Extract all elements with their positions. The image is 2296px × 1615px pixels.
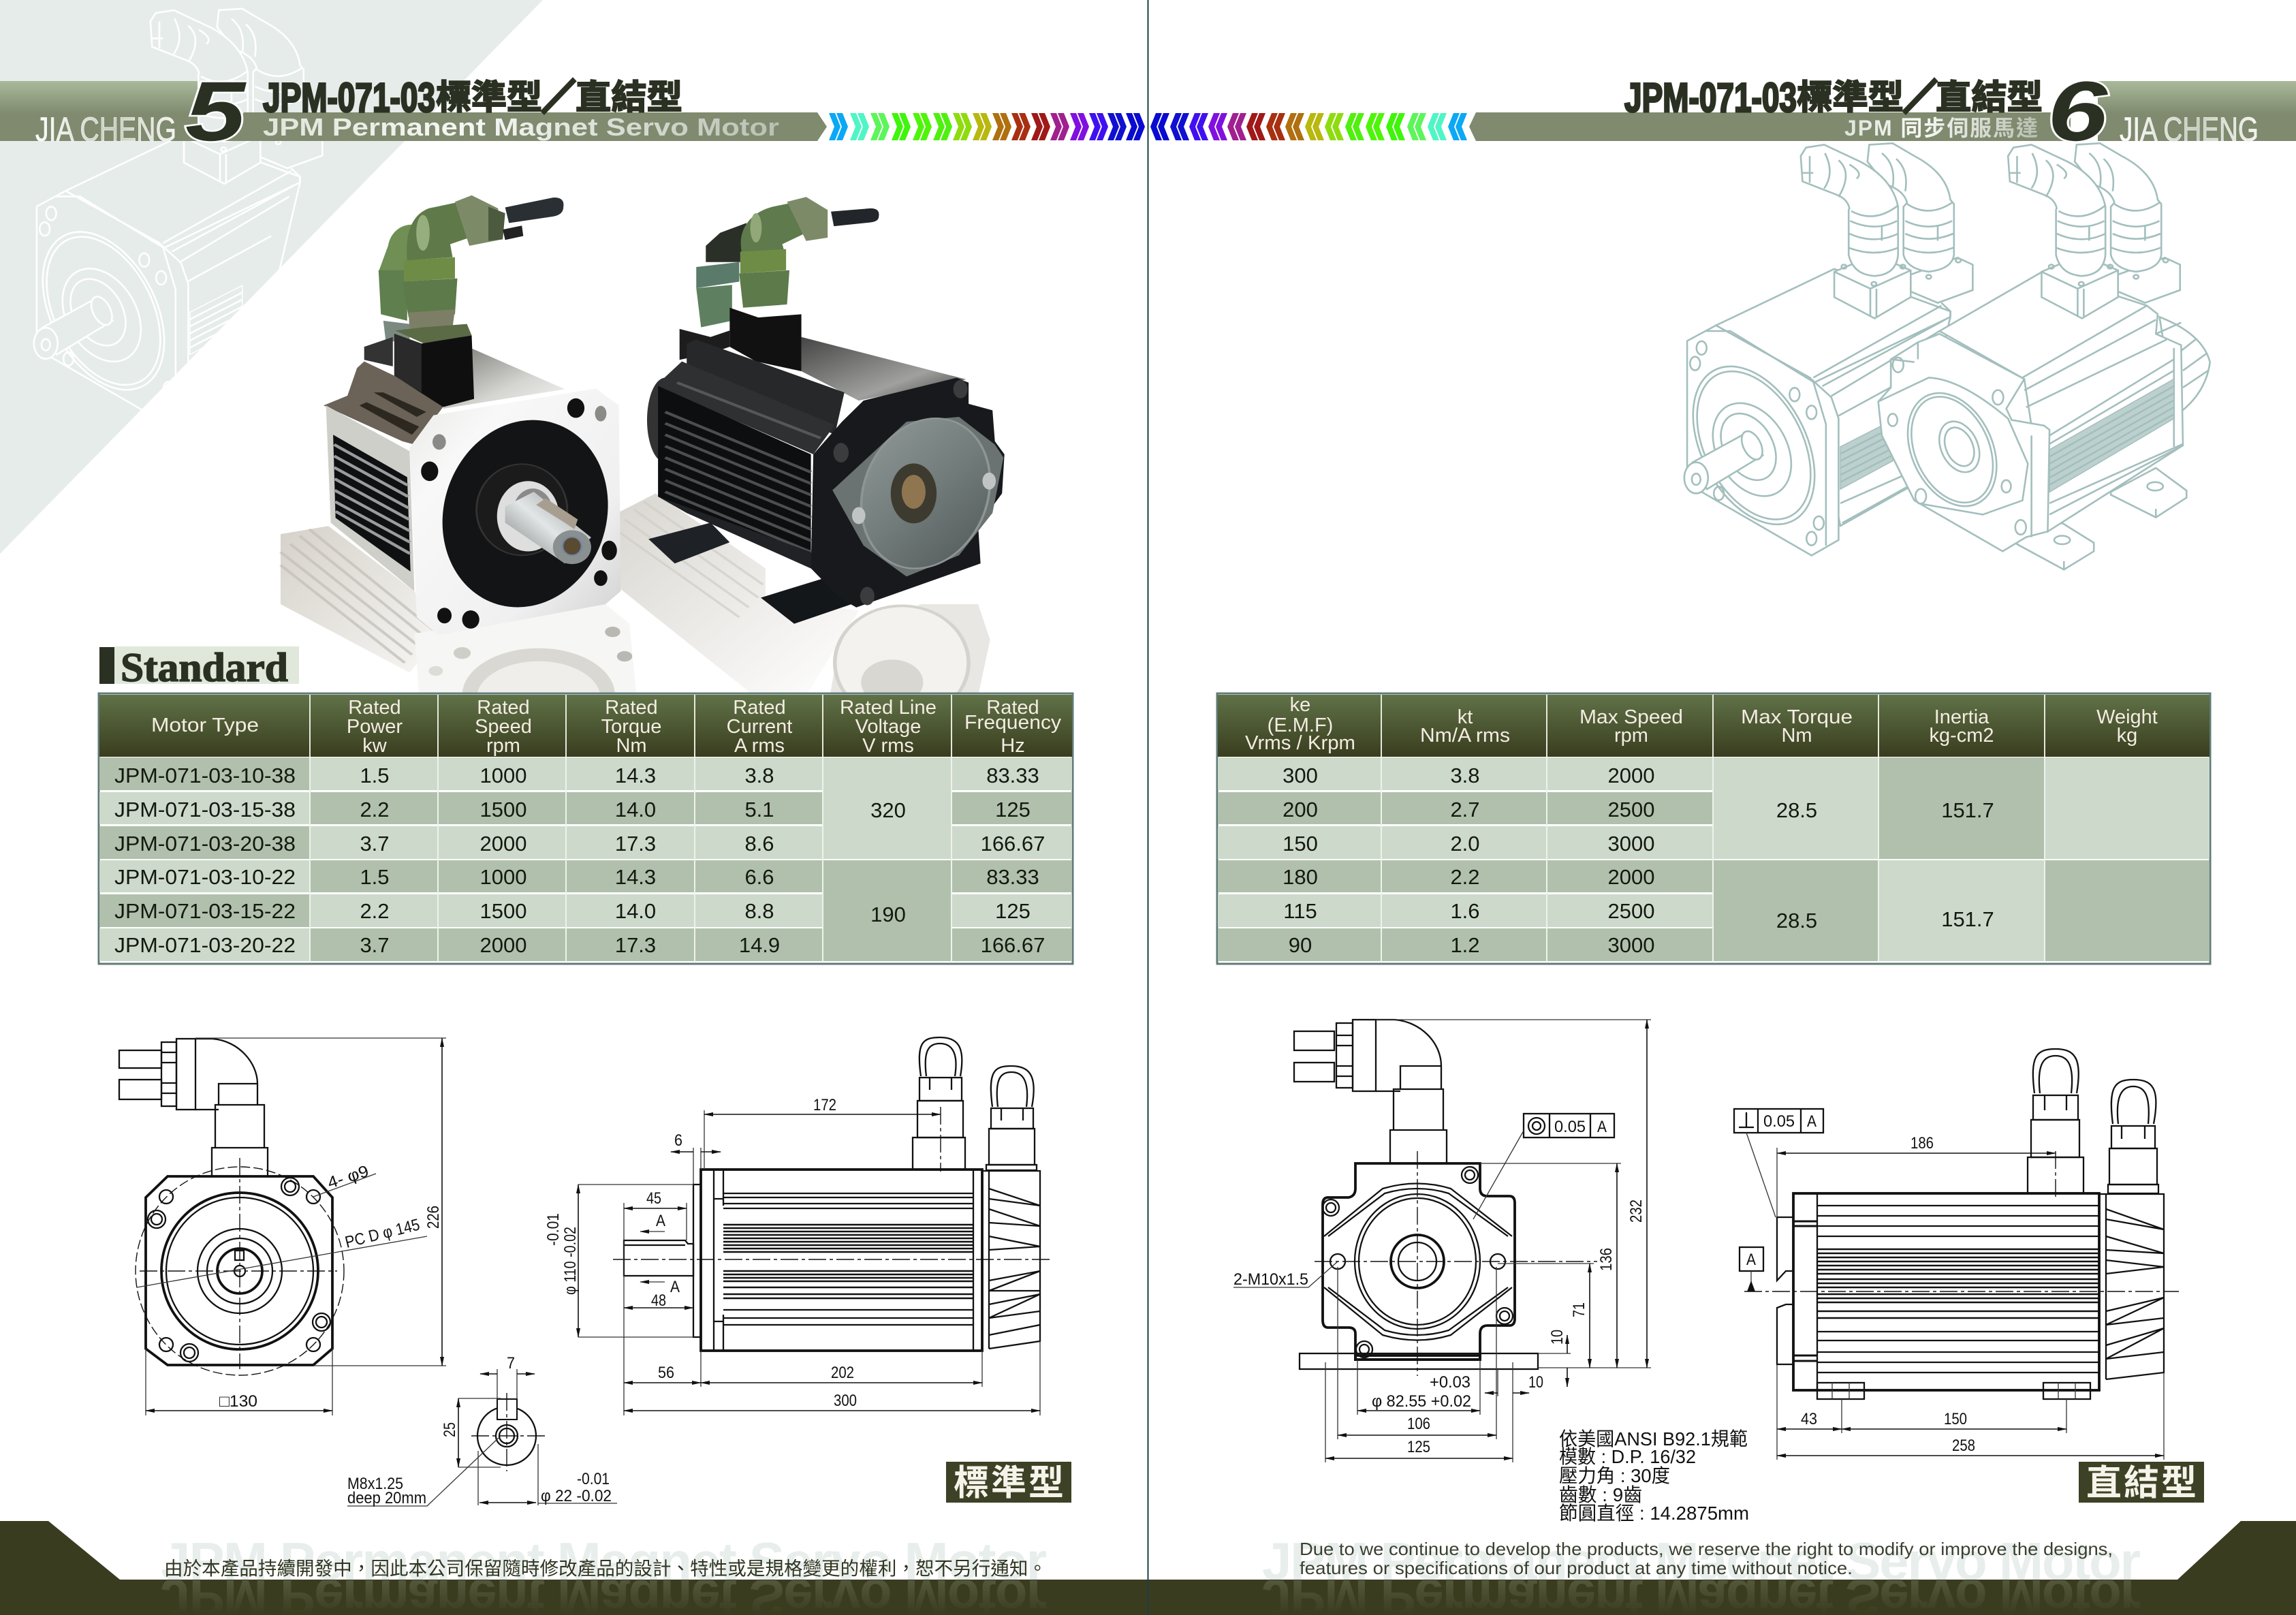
table header row: kg	[2117, 725, 2137, 747]
table values: JPM-071-03-20-38	[114, 832, 296, 856]
table values: JPM-071-03-10-38	[114, 764, 296, 787]
gear specification note: 依美國ANSI B92.1規範	[1559, 1428, 1748, 1449]
shaft key section view: 7	[507, 1354, 515, 1373]
table values: JPM-071-03-20-22	[114, 933, 296, 957]
table values: 2.2	[1450, 865, 1480, 889]
table values: 3.7	[360, 832, 390, 856]
table values: 151.7	[1941, 907, 1994, 931]
table values: JPM-071-03-10-22	[114, 865, 296, 889]
callout: PCD phi145	[137, 1216, 427, 1287]
side view dimensions: -0.01	[544, 1213, 563, 1246]
gear specification note: 壓力角 : 30度	[1559, 1465, 1670, 1486]
table values: 3000	[1608, 933, 1654, 957]
footer watermarks: JPM Permanent Magnet Servo Motor	[161, 1531, 1047, 1591]
front view dimensions: 106	[1407, 1415, 1430, 1433]
shaft key section view: 25	[441, 1422, 459, 1437]
gear specification note: 節圓直徑 : 14.2875mm	[1559, 1503, 1749, 1524]
body ridges	[687, 340, 845, 435]
perpendicularity tolerance box	[1734, 1109, 1823, 1217]
title: JPM-071-03	[1624, 75, 1797, 121]
thread callout 2-M10x1.5	[1233, 1261, 1338, 1289]
table header row: rpm	[486, 735, 520, 757]
side view dimensions: 300	[834, 1392, 857, 1410]
table header row: Nm	[1781, 725, 1812, 747]
line art of two motors on right page	[1670, 143, 2210, 569]
concentricity tolerance box: 0.05	[1554, 1118, 1586, 1136]
dimension: 226: 226	[424, 1206, 443, 1229]
table values: 1500	[480, 899, 526, 923]
band segment behind brand	[2098, 81, 2296, 141]
table values: 1500	[480, 798, 526, 821]
table header row: V rms	[862, 735, 914, 757]
table values: 28.5	[1776, 798, 1817, 822]
table header row: Rated	[605, 697, 658, 719]
title	[1624, 75, 2043, 121]
terminal block	[729, 308, 802, 371]
table values: 1.2	[1450, 933, 1480, 957]
gear specification note: 齒數 : 9齒	[1559, 1484, 1642, 1505]
table body cells	[99, 757, 1072, 961]
face plate holes	[421, 398, 617, 629]
table values: 2000	[480, 933, 526, 957]
reflections on floor	[281, 493, 990, 742]
footer note English: Due to we continue to develop the products, we reserve the right to modify or improve the designs,	[1300, 1539, 2113, 1559]
table values: 14.3	[615, 865, 656, 889]
table values	[114, 764, 1045, 957]
table values: 2.7	[1450, 798, 1480, 821]
perpendicularity tolerance box: 0.05	[1763, 1112, 1795, 1131]
table values: 1.5	[360, 865, 390, 889]
silver face plate	[409, 388, 620, 635]
table values: 151.7	[1941, 798, 1994, 822]
front view dimensions: φ 82.55 +0.02	[1372, 1392, 1471, 1411]
table values: 125	[995, 899, 1031, 923]
black front plate	[811, 378, 1005, 608]
tolerance note phi22	[538, 1470, 617, 1505]
rainbow chevrons left	[829, 113, 1145, 140]
front view dimensions: 71	[1570, 1302, 1588, 1317]
technical drawing: direct coupling type	[1233, 1020, 2204, 1524]
table values: 1000	[480, 764, 526, 787]
table values: 3.8	[1450, 764, 1480, 787]
table header row: Rated	[348, 697, 401, 719]
callout: PCD phi145: PC D φ 145	[343, 1216, 422, 1252]
title: 標準型	[1797, 78, 1904, 116]
table values: 90	[1289, 933, 1312, 957]
table values: 180	[1283, 865, 1318, 889]
cable elbow	[741, 202, 806, 252]
callout: 4-phi9: 4- φ9	[326, 1162, 371, 1193]
side view dimensions: 48	[651, 1291, 666, 1310]
table values: 320	[870, 798, 906, 822]
side view dimensions: 150	[1944, 1410, 1967, 1428]
table header row	[1218, 694, 2209, 757]
black bearing disc	[431, 415, 619, 612]
table values: 300	[1283, 764, 1318, 787]
front view dimensions: 10	[1528, 1373, 1543, 1392]
page number 6: 6	[2047, 65, 2108, 159]
thread note: deep 20mm	[347, 1489, 426, 1507]
body ridge	[324, 362, 443, 445]
table header row: rpm	[1614, 725, 1648, 747]
footer note English	[1300, 1539, 2113, 1578]
table values: 2000	[480, 832, 526, 856]
table header row: Motor Type	[151, 715, 259, 736]
table values: 83.33	[986, 764, 1039, 787]
band segment behind brand	[0, 81, 198, 141]
table values: 8.8	[744, 899, 774, 923]
title: 直結型	[1936, 78, 2043, 116]
rear connector	[706, 223, 746, 262]
table header row: Inertia	[1934, 706, 1990, 728]
shaft key section view	[441, 1354, 545, 1505]
side view dimensions: φ 110 -0.02	[561, 1227, 580, 1295]
table values: 166.67	[981, 832, 1045, 856]
table values: 2.0	[1450, 832, 1480, 856]
side view dimensions: A	[670, 1278, 680, 1296]
front view dimensions: 10	[1548, 1330, 1567, 1345]
footer watermark reflections	[161, 1580, 2140, 1605]
rear connector	[379, 225, 412, 272]
front view	[119, 1039, 344, 1375]
subtitle: JPM 同步伺服馬達	[1844, 116, 2038, 140]
side view dimensions: 45	[646, 1189, 661, 1208]
table values: 190	[870, 903, 906, 926]
table values: 1000	[480, 865, 526, 889]
table values: 115	[1283, 899, 1317, 923]
footer watermarks: JPM Permanent Magnet Servo Motor	[1262, 1531, 2141, 1591]
footer note English: features or specifications of our product at any time without notice.	[1300, 1558, 1853, 1578]
table header row: Max Torque	[1741, 706, 1853, 728]
rainbow chevrons right	[1150, 113, 1467, 140]
front connector	[404, 257, 455, 281]
table values: 14.3	[615, 764, 656, 787]
table values: 2.2	[360, 798, 390, 821]
table header row: kt	[1458, 706, 1473, 728]
table header row: Rated Line	[840, 697, 937, 719]
side view dimensions	[1777, 1134, 2164, 1460]
finned side	[658, 386, 811, 559]
table values: 125	[995, 798, 1031, 821]
concentricity tolerance box: A	[1597, 1118, 1607, 1136]
table values: 2000	[1608, 865, 1654, 889]
table frame	[1217, 693, 2210, 964]
mounting feet	[648, 522, 729, 563]
table values: 1.5	[360, 764, 390, 787]
table values: JPM-071-03-15-38	[114, 798, 296, 821]
table header row: Rated	[986, 697, 1039, 719]
title: 直結型	[576, 78, 682, 116]
table header row: A rms	[734, 735, 785, 757]
title: ／	[1904, 78, 1936, 116]
side view dimensions: A	[656, 1212, 665, 1230]
table values: 2.2	[360, 899, 390, 923]
gear specification note	[1559, 1428, 1749, 1524]
ghost line art motor on left page	[20, 9, 322, 421]
table values: 17.3	[615, 933, 656, 957]
thread callout 2-M10x1.5: 2-M10x1.5	[1233, 1270, 1308, 1289]
table values: 2500	[1608, 798, 1654, 821]
table values: 8.6	[744, 832, 774, 856]
table values: 5.1	[744, 798, 774, 821]
table header row: Torque	[601, 716, 661, 738]
badge: direct coupling type: 直結型	[2086, 1464, 2197, 1503]
table values: 3000	[1608, 832, 1654, 856]
side view	[613, 1037, 1050, 1351]
table header row: Nm	[616, 735, 647, 757]
dimension: square 130	[146, 1349, 332, 1415]
front view dimensions	[1325, 1020, 1651, 1462]
table header row	[99, 695, 1072, 757]
side view dimensions: 56	[658, 1364, 674, 1382]
table header row: Current	[727, 716, 792, 738]
table header row: Speed	[475, 716, 532, 738]
table header row: kg-cm2	[1929, 725, 1994, 747]
table values: 166.67	[981, 933, 1045, 957]
band segment behind subtitle	[1469, 112, 2071, 141]
line art: rear motor	[1670, 143, 1972, 556]
table values: 2000	[1608, 764, 1654, 787]
silver flange	[832, 417, 1003, 576]
brand name: JIA CHENG	[2120, 110, 2259, 148]
thread note	[347, 1438, 499, 1507]
table body cells	[1218, 757, 2209, 961]
datum A marker: A	[1746, 1251, 1756, 1269]
thread note: M8x1.25	[347, 1475, 403, 1493]
table values: 2500	[1608, 899, 1654, 923]
side view	[1744, 1049, 2179, 1399]
tolerance note phi22: -0.01	[577, 1470, 610, 1488]
band segment behind subtitle	[225, 112, 827, 141]
front view dimensions: 232	[1627, 1200, 1646, 1223]
front view	[1294, 1020, 1597, 1376]
front view dimensions: 136	[1597, 1248, 1616, 1271]
table header row: (E.M.F)	[1268, 715, 1333, 736]
right black motor	[647, 197, 1005, 624]
front view dimensions: +0.03	[1430, 1373, 1471, 1392]
side view dimensions: 202	[831, 1364, 854, 1382]
header band: left page	[0, 65, 827, 159]
table header row: kw	[362, 735, 388, 757]
subtitle: JPM Permanent Magnet Servo Motor	[263, 113, 779, 141]
technical drawing: standard type	[119, 1037, 1071, 1507]
table values: 83.33	[986, 865, 1039, 889]
table values: 150	[1283, 832, 1318, 856]
table values: 28.5	[1776, 909, 1817, 932]
table header row: Max Speed	[1579, 706, 1683, 728]
table header row: Frequency	[964, 712, 1062, 734]
table values: 14.0	[615, 899, 656, 923]
side view dimensions: 172	[813, 1096, 836, 1114]
footer dark band	[0, 1521, 2296, 1615]
dimension: square 130: □130	[219, 1392, 257, 1411]
line art: mounting feet	[2017, 468, 2186, 569]
badge: standard type: 標準型	[954, 1464, 1064, 1503]
tolerance note phi22: φ 22 -0.02	[541, 1487, 612, 1505]
footer watermarks	[161, 1542, 2140, 1580]
photo: two servo motors	[281, 195, 1005, 742]
side view dimensions	[544, 1096, 1040, 1415]
table header row: Hz	[1001, 735, 1025, 757]
finned side	[326, 405, 414, 591]
title: 標準型	[436, 78, 542, 116]
section label: Standard: Standard	[121, 645, 288, 690]
gear specification note: 模數 : D.P. 16/32	[1559, 1446, 1696, 1467]
front connector	[740, 249, 786, 274]
table values: 200	[1283, 798, 1318, 821]
footer note Chinese: 由於本產品持續開發中，因此本公司保留隨時修改產品的設計、特性或是規格變更的權利，恕不另行通知。	[164, 1558, 1047, 1579]
table header row: Voltage	[855, 716, 921, 738]
perpendicularity tolerance box: A	[1807, 1112, 1817, 1131]
side view dimensions: 43	[1801, 1410, 1817, 1428]
table header row: Power	[347, 716, 403, 738]
front view dimensions: 125	[1407, 1438, 1430, 1456]
title: JPM-071-03	[263, 75, 435, 121]
center fold line	[1147, 0, 1148, 1615]
side view dimensions: 258	[1952, 1437, 1975, 1455]
table values: JPM-071-03-15-22	[114, 899, 296, 923]
table header row: Weight	[2096, 706, 2158, 728]
table values: 1.6	[1450, 899, 1480, 923]
left silver motor	[324, 195, 620, 635]
table: electrical and mechanical constants	[1217, 693, 2210, 964]
callout: 4-phi9	[313, 1162, 376, 1197]
side view dimensions: 6	[674, 1131, 682, 1150]
table header row: Nm/A rms	[1420, 725, 1510, 747]
table values: 3.7	[360, 933, 390, 957]
table values: 14.0	[615, 798, 656, 821]
terminal block	[394, 334, 474, 407]
table: rated specifications	[99, 693, 1073, 964]
table header row: Rated	[477, 697, 530, 719]
title	[263, 75, 682, 121]
side view dimensions: 186	[1910, 1134, 1934, 1153]
table values: 17.3	[615, 832, 656, 856]
line art: front motor	[1878, 143, 2210, 551]
title: ／	[542, 78, 575, 116]
table values: 3.8	[744, 764, 774, 787]
page number 5: 5	[185, 65, 247, 159]
dimension: 226	[195, 1038, 446, 1366]
cable elbow	[407, 202, 469, 260]
table values: 14.9	[739, 933, 780, 957]
left page pale triangle background	[0, 0, 543, 554]
table values: 6.6	[744, 865, 774, 889]
table values	[1283, 764, 1994, 957]
concentricity tolerance box	[1473, 1114, 1614, 1219]
table header row: Rated	[733, 697, 786, 719]
table header row: ke	[1290, 694, 1310, 716]
brand name: JIA CHENG	[35, 110, 176, 148]
shaft	[505, 492, 591, 563]
table frame	[99, 693, 1073, 964]
datum A marker	[1740, 1247, 1763, 1291]
header band: right page	[1469, 65, 2296, 159]
table header row: Vrms / Krpm	[1245, 732, 1355, 754]
